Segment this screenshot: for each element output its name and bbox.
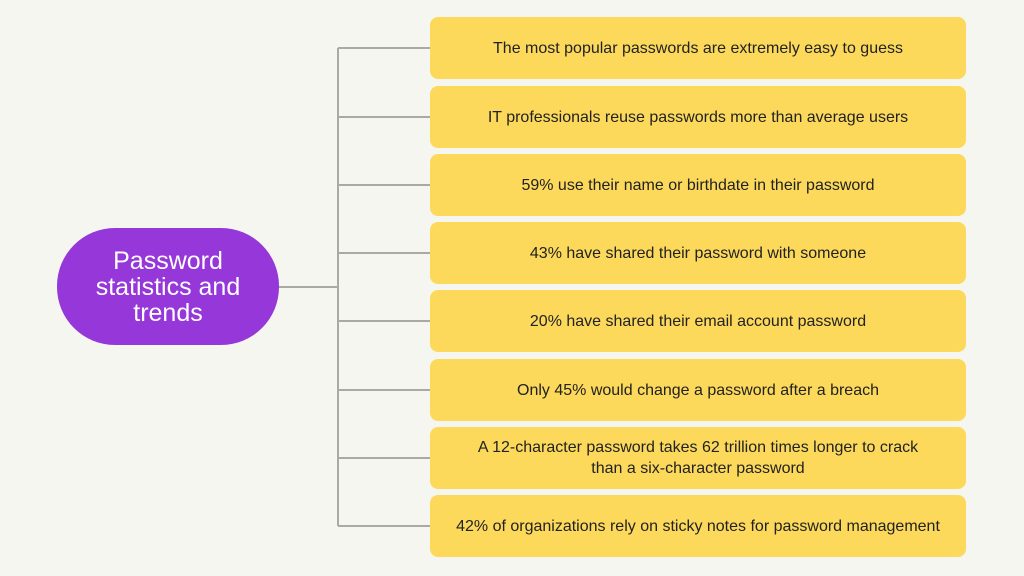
title pill: statistics and [96, 272, 240, 300]
stat 6 [430, 359, 966, 421]
stat 5 [430, 290, 966, 352]
title pill: trends [133, 298, 203, 326]
stat 3 [430, 154, 966, 216]
stat 1: The most popular passwords are extremely easy to guess [493, 40, 903, 56]
stat 8 [430, 495, 966, 557]
stat 1 [430, 17, 966, 79]
stat 6: Only 45% would change a password after a breach [517, 382, 879, 398]
stat 7 [430, 427, 966, 489]
title pill [57, 228, 279, 345]
stat 7: A 12-character password takes 62 trillion times longer to crack [478, 439, 918, 456]
title pill: Password [113, 246, 223, 274]
stat 8: 42% of organizations rely on sticky notes for password management [456, 518, 940, 534]
stat 2 [430, 86, 966, 148]
stat 7: than a six-character password [591, 460, 805, 477]
stat 5: 20% have shared their email account password [530, 312, 866, 330]
stat 2: IT professionals reuse passwords more than average users [488, 108, 908, 126]
stat 4 [430, 222, 966, 284]
stat 3: 59% use their name or birthdate in their password [521, 176, 875, 194]
stat 4: 43% have shared their password with someone [530, 244, 866, 262]
